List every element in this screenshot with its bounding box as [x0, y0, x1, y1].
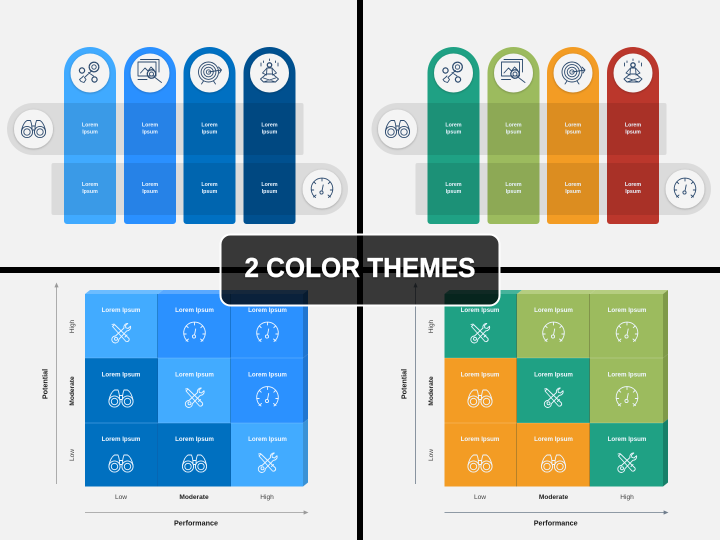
panel: blue columns infographic: [7, 47, 348, 224]
cell labels: Lorem Ipsum: [608, 436, 647, 443]
icon: gauge: [666, 170, 704, 208]
column text, row 2: Lorem: [625, 182, 641, 188]
column text, row 2: Ipsum: [446, 189, 462, 195]
matrix cells: [444, 294, 663, 486]
column text, row 1: Lorem: [142, 122, 158, 128]
title: 2 COLOR THEMES: [244, 252, 476, 283]
icon: target: [190, 54, 229, 92]
arrow: potential axis: [414, 284, 417, 484]
cell labels: Lorem Ipsum: [175, 436, 214, 443]
icon: meditating figure: [250, 54, 289, 92]
arrow: performance axis: [444, 511, 668, 514]
arrow: potential axis: [55, 284, 58, 484]
panel: multicolor performance potential matrix: [400, 284, 668, 528]
cell labels: [102, 307, 287, 443]
column text, row 1: [82, 122, 278, 136]
cell labels: Lorem Ipsum: [534, 436, 573, 443]
cell labels: Lorem Ipsum: [102, 436, 141, 443]
cell labels: Lorem Ipsum: [461, 307, 500, 314]
cell labels: Lorem Ipsum: [608, 307, 647, 314]
cell labels: Lorem Ipsum: [534, 307, 573, 314]
axis labels: High: [428, 319, 435, 333]
column 3: [547, 47, 599, 224]
cell labels: Lorem Ipsum: [461, 372, 500, 378]
axis labels: Moderate: [539, 494, 568, 501]
panel: blue performance potential matrix: [40, 284, 308, 528]
cell labels: [461, 307, 647, 443]
column 2: [124, 47, 176, 224]
column text, row 1: Ipsum: [446, 130, 462, 136]
column 4: [244, 47, 296, 224]
column text, row 1: Ipsum: [506, 130, 522, 136]
icon: binoculars: [14, 110, 53, 148]
column text, row 1: Lorem: [445, 122, 462, 128]
axis labels: Performance: [534, 518, 578, 528]
icon: meditating figure: [614, 54, 652, 92]
icon: tools and gears: [434, 54, 473, 92]
axis labels: Low: [474, 494, 486, 501]
axis labels: High: [260, 494, 274, 501]
column text, row 2: Ipsum: [202, 189, 218, 195]
column text, row 2: Lorem: [445, 182, 462, 188]
cell icons: [468, 322, 638, 472]
cell labels: Lorem Ipsum: [102, 372, 141, 378]
column text, row 2: [82, 182, 278, 195]
column text, row 1: Lorem: [201, 122, 218, 128]
cell labels: Lorem Ipsum: [248, 436, 287, 443]
axis labels: Potential: [40, 369, 50, 399]
cell icons: [109, 322, 278, 472]
matrix top and side faces: [444, 290, 668, 486]
icon: target: [554, 54, 592, 92]
column 4: [607, 47, 659, 224]
column text, row 2: Lorem: [201, 182, 218, 188]
column 1: [428, 47, 480, 224]
cell labels: Lorem Ipsum: [248, 307, 287, 314]
matrix top and side faces: [85, 290, 308, 486]
axis labels: [400, 319, 634, 528]
axis labels: [40, 319, 274, 528]
band 1: [7, 103, 304, 155]
icon: binoculars: [378, 110, 417, 148]
axis labels: High: [620, 494, 634, 501]
band 1: [372, 103, 666, 155]
axis labels: Low: [69, 449, 76, 461]
axis labels: High: [69, 319, 76, 333]
column 2: [488, 47, 540, 224]
column text, row 1: Lorem: [261, 122, 278, 128]
column text, row 1: Ipsum: [82, 130, 98, 136]
column text, row 2: Lorem: [505, 182, 522, 188]
column text, row 1: Lorem: [565, 122, 581, 128]
column 1: [64, 47, 116, 224]
column text, row 2: Ipsum: [625, 189, 641, 195]
column text, row 1: Lorem: [505, 122, 522, 128]
icon: analytics window: [130, 54, 170, 92]
title banner: [220, 234, 500, 306]
column text, row 2: Lorem: [261, 182, 278, 188]
panel: multicolor columns infographic: [372, 47, 711, 224]
column 3: [184, 47, 236, 224]
band 2: [52, 163, 348, 215]
icon: gauge: [302, 170, 342, 208]
axis labels: Potential: [400, 369, 408, 399]
column text, row 1: Ipsum: [625, 130, 641, 136]
column text, row 1: [445, 122, 641, 136]
cell labels: Lorem Ipsum: [175, 307, 214, 314]
band 2: [416, 163, 711, 215]
column text, row 2: Ipsum: [565, 189, 581, 195]
axis labels: Low: [115, 494, 127, 501]
cell labels: Lorem Ipsum: [102, 307, 141, 314]
axis labels: Moderate: [69, 376, 76, 406]
cell labels: Lorem Ipsum: [608, 372, 647, 378]
cell labels: Lorem Ipsum: [175, 372, 214, 378]
column text, row 2: Lorem: [82, 182, 98, 188]
icon: tools and gears: [70, 54, 110, 92]
arrow: performance axis: [85, 511, 308, 514]
axis labels: Performance: [174, 518, 218, 528]
cell labels: Lorem Ipsum: [461, 436, 500, 443]
column text, row 2: Lorem: [142, 182, 158, 188]
axis labels: Low: [428, 449, 435, 461]
column text, row 1: Ipsum: [262, 130, 278, 136]
column text, row 2: Ipsum: [506, 189, 522, 195]
column text, row 1: Lorem: [625, 122, 641, 128]
column text, row 1: Ipsum: [202, 130, 218, 136]
cell labels: Lorem Ipsum: [534, 372, 573, 378]
column text, row 1: Ipsum: [565, 130, 581, 136]
column text, row 1: Ipsum: [142, 130, 158, 136]
column text, row 2: Ipsum: [142, 189, 158, 195]
matrix cells: [85, 294, 303, 486]
axis labels: Moderate: [179, 494, 209, 501]
column text, row 2: Lorem: [565, 182, 581, 188]
axis labels: Moderate: [428, 376, 435, 406]
column text, row 2: Ipsum: [82, 189, 98, 195]
column text, row 1: Lorem: [82, 122, 98, 128]
column text, row 2: [445, 182, 641, 195]
column text, row 2: Ipsum: [262, 189, 278, 195]
cell labels: Lorem Ipsum: [248, 372, 287, 378]
icon: analytics window: [494, 54, 533, 92]
